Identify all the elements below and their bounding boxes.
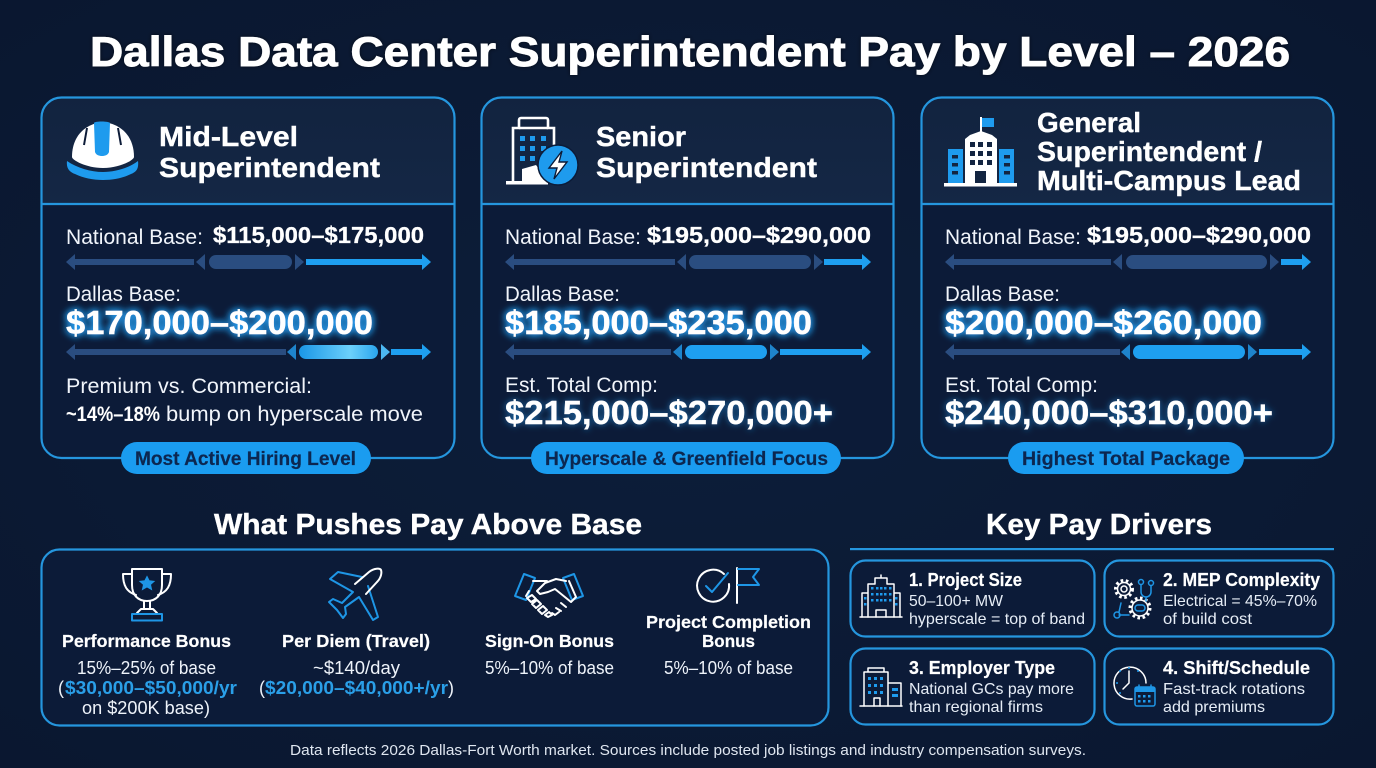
- heading: what pushes pay above base: What Pushes Pay Above Base: [214, 509, 642, 541]
- card: MEP complexity: of build cost: [1163, 611, 1253, 628]
- range bar: dallas: [945, 344, 1311, 360]
- icon: building with lightning bolt: [506, 118, 578, 185]
- dallas base: Dallas Base:: [945, 283, 1060, 306]
- card: MEP complexity: 2. MEP Complexity: [1163, 570, 1320, 590]
- item: performance bonus: on $200K base): [82, 698, 210, 718]
- panel: mid-level superintendent: [41, 97, 455, 474]
- dallas base: $200,000–$260,000: [945, 305, 1262, 342]
- badge: Most Active Hiring Level: [135, 449, 356, 470]
- card: project size: hyperscale = top of band: [909, 611, 1085, 628]
- premium text: bump on hyperscale move: [166, 403, 423, 426]
- item: sign-on bonus: [485, 574, 614, 678]
- item: sign-on bonus: 5%–10% of base: [485, 658, 614, 678]
- range bar: dallas: [66, 344, 431, 360]
- card: shift and schedule: [1104, 648, 1334, 724]
- title: Dallas Data Center Superintendent Pay by Level – 2026: [90, 28, 1290, 75]
- estimated total comp: [945, 374, 1273, 432]
- badge: Highest Total Package: [1022, 449, 1230, 470]
- item: performance bonus: (: [58, 678, 64, 698]
- heading: mid-level superintendent: Superintendent: [159, 152, 380, 183]
- card: employer type: than regional firms: [909, 699, 1043, 716]
- national base row: [945, 222, 1311, 249]
- dallas base: [66, 283, 373, 342]
- heading: general superintendent / multi-campus lead: [1037, 107, 1301, 196]
- item: per diem: (: [259, 678, 265, 698]
- heading: senior superintendent: Senior: [596, 121, 686, 152]
- national base row: National Base:: [66, 226, 203, 249]
- item: sign-on bonus: Sign-On Bonus: [485, 631, 614, 651]
- estimated total comp: Est. Total Comp:: [505, 374, 658, 397]
- card: employer type: 3. Employer Type: [909, 658, 1055, 678]
- premium text: ~14%–18%: [66, 403, 160, 426]
- national base row: [505, 222, 871, 249]
- dallas base: $170,000–$200,000: [66, 305, 373, 342]
- dallas base: [945, 283, 1262, 342]
- estimated total comp: $240,000–$310,000+: [945, 395, 1273, 432]
- item: per diem: Per Diem (Travel): [282, 631, 430, 651]
- icon: airplane: [329, 569, 381, 620]
- badge: [531, 442, 841, 474]
- heading: key pay drivers: Key Pay Drivers: [986, 509, 1212, 541]
- icon: trophy: [123, 569, 171, 620]
- item: performance bonus: [58, 569, 237, 718]
- footer source note: Data reflects 2026 Dallas-Fort Worth market. Sources include posted job listings and industry compensation surveys.: [290, 743, 1086, 759]
- panel: senior superintendent: [481, 97, 894, 474]
- panel: what pushes pay above base: [42, 550, 828, 726]
- national base row: [66, 222, 424, 249]
- national base row: $195,000–$290,000: [647, 222, 871, 248]
- heading: senior superintendent: [596, 121, 817, 183]
- card: employer type: National GCs pay more: [909, 681, 1074, 698]
- estimated total comp: [505, 374, 833, 432]
- item: performance bonus: Performance Bonus: [62, 631, 231, 651]
- item: performance bonus: $30,000–$50,000/yr: [65, 678, 237, 698]
- icon: clock and calendar: [1114, 667, 1155, 706]
- item: project completion bonus: Bonus: [702, 631, 755, 651]
- icon: handshake: [515, 574, 583, 617]
- item: project completion bonus: [646, 568, 811, 678]
- card: shift and schedule: add premiums: [1163, 699, 1265, 716]
- icon: hard hat: [67, 122, 138, 180]
- item: project completion bonus: 5%–10% of base: [664, 658, 793, 678]
- item: performance bonus: 15%–25% of base: [77, 658, 216, 678]
- premium text: [66, 375, 423, 426]
- item: per diem: ~$140/day: [313, 658, 400, 678]
- icon: gears and circuits: [1114, 580, 1154, 618]
- national base row: National Base:: [505, 226, 641, 249]
- heading: mid-level superintendent: Mid-Level: [159, 121, 298, 152]
- card: project size: [850, 560, 1094, 636]
- premium text: Premium vs. Commercial:: [66, 375, 312, 398]
- dallas base: Dallas Base:: [66, 283, 181, 306]
- badge: [121, 442, 371, 474]
- item: project completion bonus: Project Completion: [646, 612, 811, 632]
- heading: mid-level superintendent: [159, 121, 380, 183]
- heading: general superintendent / multi-campus lead: Superintendent /: [1037, 136, 1262, 167]
- card: shift and schedule: Fast-track rotations: [1163, 681, 1305, 698]
- heading: general superintendent / multi-campus lead: Multi-Campus Lead: [1037, 165, 1301, 196]
- card: employer type: [850, 648, 1094, 724]
- item: per diem: [259, 569, 454, 698]
- dallas base: Dallas Base:: [505, 283, 620, 306]
- card: project size: 1. Project Size: [909, 570, 1022, 590]
- item: per diem: $20,000–$40,000+/yr: [265, 678, 448, 698]
- heading: general superintendent / multi-campus lead: General: [1037, 107, 1141, 138]
- icon: data center towers: [860, 575, 902, 617]
- range bar: dallas: [505, 344, 871, 360]
- range bar: national: [66, 254, 431, 270]
- dallas base: $185,000–$235,000: [505, 305, 812, 342]
- card: project size: 50–100+ MW: [909, 593, 1004, 610]
- icon: campus building with flag: [944, 117, 1017, 186]
- heading: senior superintendent: Superintendent: [596, 152, 817, 183]
- range bar: national: [945, 254, 1311, 270]
- estimated total comp: $215,000–$270,000+: [505, 395, 833, 432]
- item: per diem: ): [448, 678, 454, 698]
- card: MEP complexity: Electrical = 45%–70%: [1163, 593, 1317, 610]
- badge: Hyperscale & Greenfield Focus: [545, 449, 828, 470]
- national base row: National Base:: [945, 226, 1081, 249]
- badge: [1008, 442, 1244, 474]
- card: shift and schedule: 4. Shift/Schedule: [1163, 658, 1310, 678]
- national base row: $195,000–$290,000: [1087, 222, 1311, 248]
- card: MEP complexity: [1104, 560, 1334, 636]
- icon: office building: [860, 668, 902, 706]
- national base row: $115,000–$175,000: [213, 222, 424, 248]
- estimated total comp: Est. Total Comp:: [945, 374, 1098, 397]
- range bar: national: [505, 254, 871, 270]
- panel: general superintendent: [921, 97, 1334, 474]
- dallas base: [505, 283, 812, 342]
- icon: checkmark and flag: [697, 568, 759, 603]
